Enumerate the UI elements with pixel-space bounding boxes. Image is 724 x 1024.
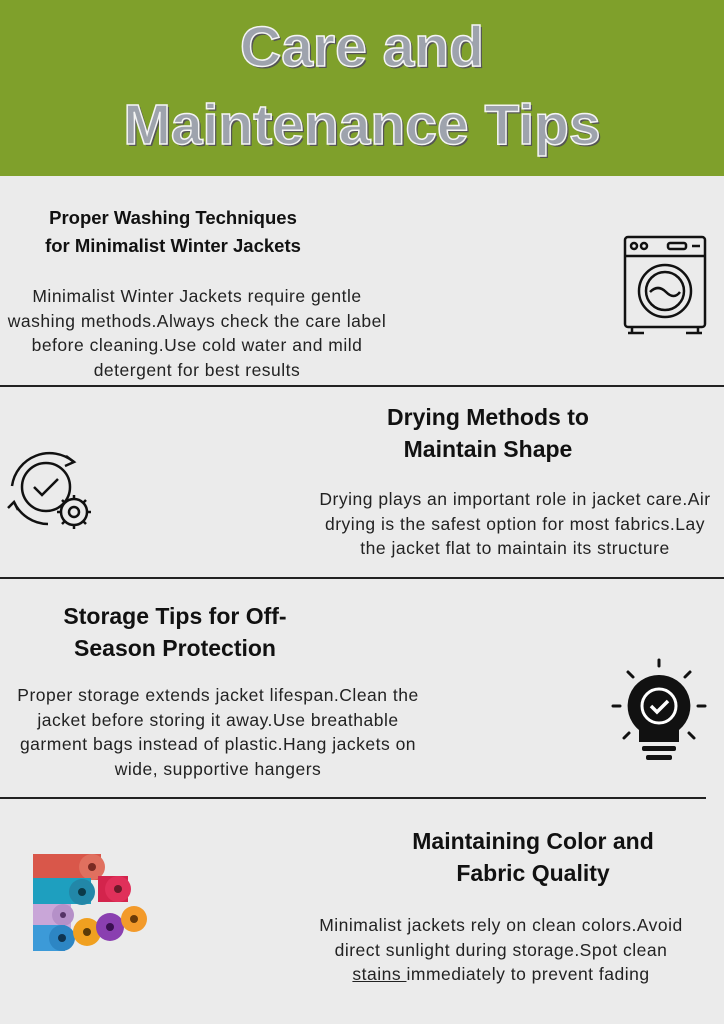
section 1 text: Minimalist Winter Jackets require gentle <box>32 286 362 306</box>
section 2 text: the jacket flat to maintain its structure <box>360 538 670 558</box>
section 2 text: Drying plays an important role in jacket care.Air <box>319 489 711 509</box>
section 1 heading <box>45 207 301 256</box>
section 3 text <box>17 685 419 778</box>
section 3 text: Proper storage extends jacket lifespan.Clean the <box>17 685 419 705</box>
section 1 heading: for Minimalist Winter Jackets <box>45 235 301 256</box>
section 3 text: wide, supportive hangers <box>115 758 321 778</box>
title <box>123 15 601 158</box>
section 2 text: drying is the safest option for most fabrics.Lay <box>325 514 705 534</box>
icon: check with gear <box>7 452 91 529</box>
image: fabric rolls <box>33 854 147 951</box>
section 2 heading: Maintain Shape <box>404 436 572 462</box>
section 1 text <box>8 286 386 380</box>
section 2 text <box>319 489 711 558</box>
section 1 text: before cleaning.Use cold water and mild <box>32 335 362 355</box>
header banner <box>0 0 724 176</box>
section 1 heading: Proper Washing Techniques <box>49 207 297 228</box>
section 4 heading <box>412 828 654 886</box>
title: Maintenance Tips <box>123 93 601 157</box>
section 4 text: direct sunlight during storage.Spot clean <box>335 940 667 960</box>
section 3 text: jacket before storing it away.Use breathable <box>37 710 399 730</box>
section 3 heading: Storage Tips for Off- <box>63 603 287 629</box>
section 4 heading: Fabric Quality <box>456 860 610 886</box>
section 3 text: garment bags instead of plastic.Hang jackets on <box>20 734 416 754</box>
section 4 text: stains immediately to prevent fading <box>352 964 650 984</box>
icon: washing machine <box>624 236 706 334</box>
title: Care and <box>240 15 484 79</box>
section 4 text <box>319 915 683 984</box>
section 3 heading <box>63 603 287 661</box>
icon: light bulb with check <box>612 658 706 760</box>
section 1 text: detergent for best results <box>94 360 300 380</box>
section 1 text: washing methods.Always check the care label <box>8 310 386 330</box>
section 4 heading: Maintaining Color and <box>412 828 654 854</box>
section 2 heading: Drying Methods to <box>387 404 589 430</box>
section 3 heading: Season Protection <box>74 635 276 661</box>
section 2 heading <box>387 404 589 462</box>
section 4 text: Minimalist jackets rely on clean colors.Avoid <box>319 915 683 935</box>
